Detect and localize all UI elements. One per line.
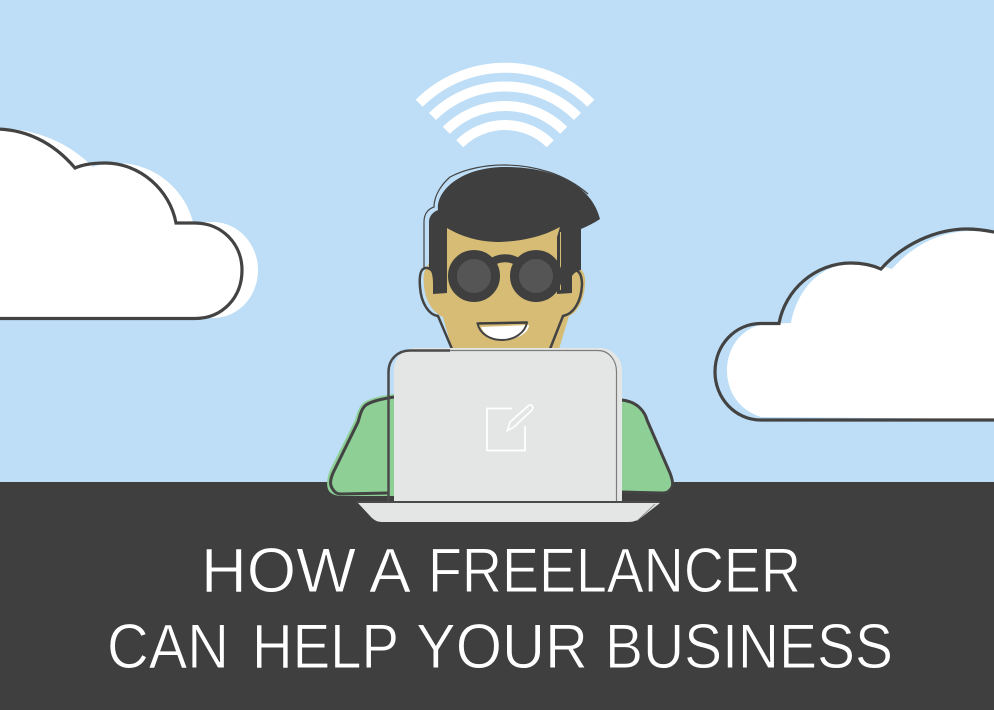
desk band — [0, 482, 994, 710]
icon: note and pencil — [487, 405, 533, 450]
shirt: right sleeve — [622, 399, 673, 493]
title — [107, 536, 893, 682]
title: FREELANCER — [428, 536, 801, 606]
hair — [424, 165, 600, 294]
right cloud — [715, 229, 994, 420]
neck and jaw — [420, 226, 585, 349]
title: YOUR — [416, 612, 588, 682]
freelancer character — [327, 165, 673, 522]
laptop base — [356, 502, 660, 522]
title: A — [369, 536, 411, 606]
title: CAN — [107, 612, 229, 682]
smile — [478, 322, 529, 340]
title: HELP — [252, 612, 399, 682]
icon: wifi signal — [419, 68, 591, 144]
laptop screen — [388, 348, 622, 501]
title: BUSINESS — [605, 612, 893, 682]
shirt: left sleeve — [327, 394, 394, 496]
left cloud — [0, 128, 258, 318]
sunglasses — [452, 254, 558, 298]
title: HOW — [201, 536, 357, 606]
